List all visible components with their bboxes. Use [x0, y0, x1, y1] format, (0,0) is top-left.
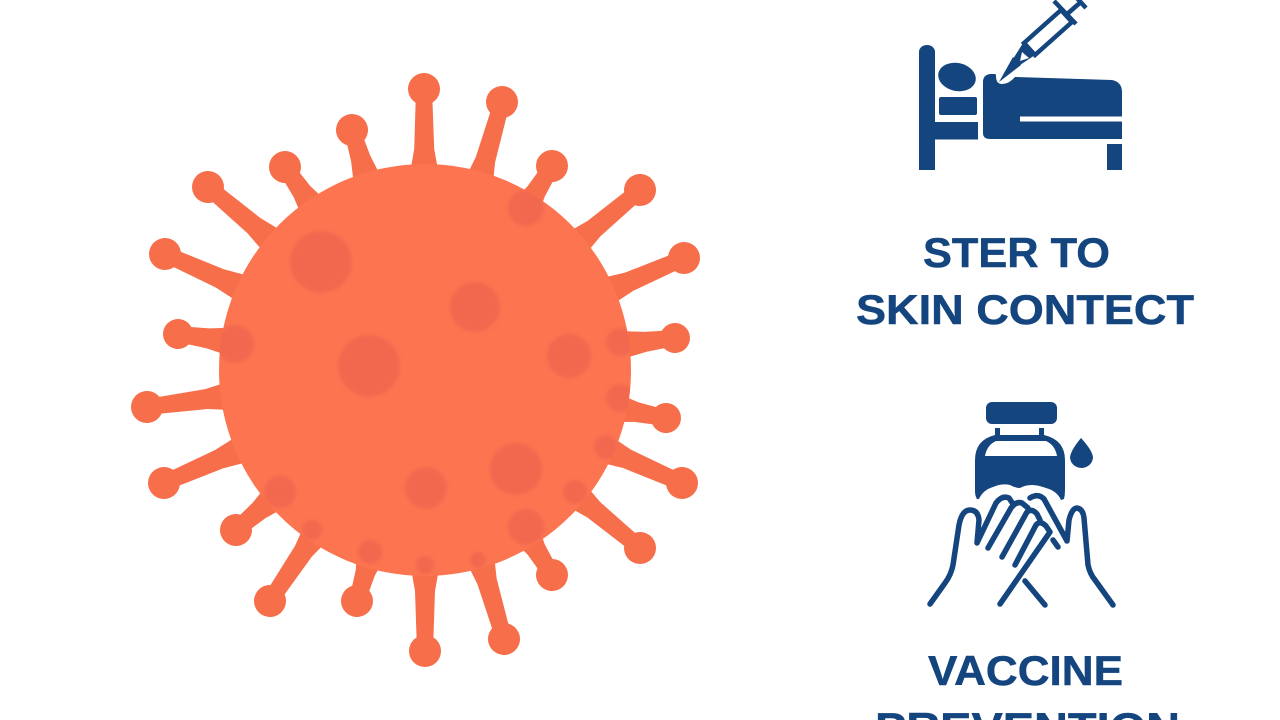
syringe hub	[1013, 43, 1035, 65]
heading: skin contact	[856, 229, 1194, 333]
hands	[930, 496, 1113, 605]
blanket and mattress	[983, 74, 1122, 139]
heading: vaccine prevention: VACCINE	[928, 647, 1123, 694]
virus body	[219, 164, 631, 576]
droplet	[1070, 438, 1093, 468]
icon: virus	[129, 73, 705, 667]
vial body	[975, 428, 1065, 500]
bed leg	[1107, 144, 1122, 170]
patient head	[936, 59, 978, 95]
heading: skin contact: SKIN CONTECT	[856, 286, 1194, 333]
heading: vaccine prevention	[875, 647, 1180, 720]
virus spikes	[129, 73, 705, 667]
bed rail	[935, 122, 978, 140]
needle	[999, 57, 1021, 82]
icon: vaccine vial and hands	[930, 402, 1113, 605]
virus surface blotches	[216, 190, 634, 574]
pillow	[939, 97, 977, 115]
bed headboard	[919, 45, 935, 170]
heading: skin contact: STER TO	[923, 229, 1110, 276]
syringe barrel and plunger	[1024, 0, 1086, 55]
syringe	[999, 0, 1086, 82]
vial cap	[986, 402, 1057, 424]
icon: patient in bed receiving injection	[919, 0, 1122, 170]
